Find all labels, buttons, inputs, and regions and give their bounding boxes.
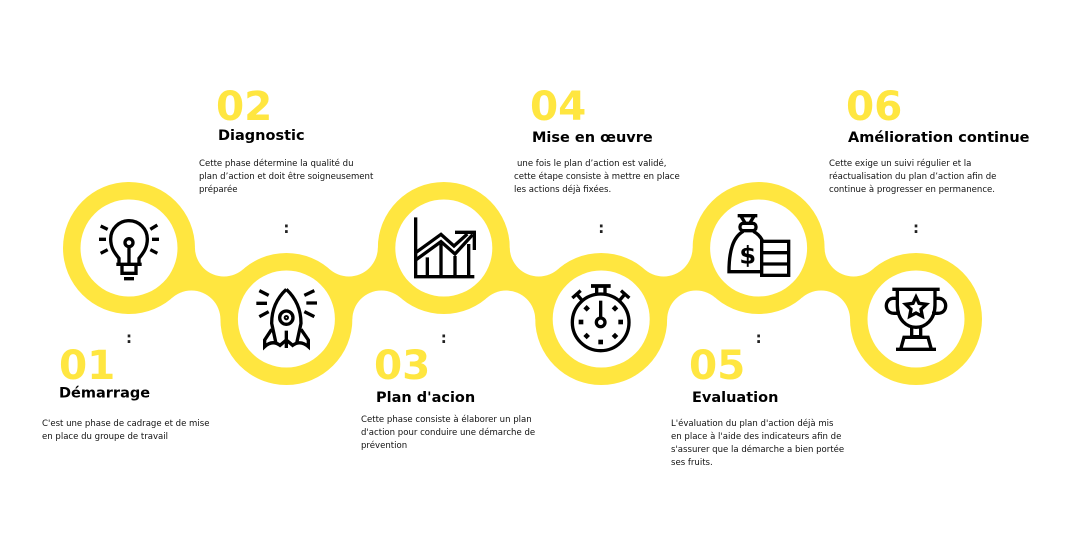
separator dots: : bbox=[126, 329, 132, 347]
step 06: continue à progresser en permanence. bbox=[829, 185, 995, 195]
step 03 bbox=[361, 341, 535, 451]
step 01: Démarrage bbox=[59, 386, 150, 402]
step 03: prévention bbox=[361, 440, 407, 451]
step 03: Cette phase consiste à élaborer un plan bbox=[361, 414, 532, 425]
icon: light bulb bbox=[99, 221, 159, 279]
step 06: 06 bbox=[846, 82, 902, 130]
step 02: préparée bbox=[199, 184, 238, 195]
step 03: Plan d'acion bbox=[376, 390, 475, 406]
step 05: ses fruits. bbox=[671, 458, 713, 468]
step 02: 02 bbox=[216, 82, 272, 130]
icon: growth chart bbox=[416, 217, 474, 277]
step 06: réactualisation du plan d’action afin de bbox=[829, 171, 996, 182]
icon: money bag and coins: $ bbox=[739, 242, 756, 270]
icon: trophy bbox=[886, 289, 946, 349]
step 05: L'évaluation du plan d'action déjà mis bbox=[671, 418, 834, 429]
separator dots: : bbox=[283, 219, 289, 237]
separator dots: : bbox=[441, 329, 447, 347]
icon: stopwatch bbox=[572, 286, 629, 351]
step 01: C'est une phase de cadrage et de mise bbox=[42, 419, 209, 429]
step 03: d'action pour conduire une démarche de bbox=[361, 427, 535, 438]
separator dots: : bbox=[598, 219, 604, 237]
step 02: plan d’action et doit être soigneusement bbox=[199, 171, 374, 182]
step 01: 01 bbox=[59, 341, 115, 389]
step 04: une fois le plan d’action est validé, bbox=[517, 158, 667, 169]
step 05: Evaluation bbox=[692, 390, 778, 406]
step 01: en place du groupe de travail bbox=[42, 432, 168, 442]
step 04: cette étape consiste à mettre en place bbox=[514, 171, 680, 182]
step 04: 04 bbox=[530, 82, 586, 130]
step 03: 03 bbox=[374, 341, 430, 389]
icon: money bag and coins bbox=[729, 216, 789, 275]
step 06 bbox=[829, 82, 1030, 195]
icon: rocket bbox=[256, 289, 317, 348]
step 05 bbox=[671, 341, 844, 468]
separator dots: : bbox=[913, 219, 919, 237]
step 02: Cette phase détermine la qualité du bbox=[199, 158, 354, 169]
step 05: s'assurer que la démarche a bien portée bbox=[671, 444, 844, 455]
step 06: Amélioration continue bbox=[848, 130, 1030, 146]
step 04: Mise en œuvre bbox=[532, 130, 653, 146]
separator dots bbox=[126, 219, 919, 347]
step 05: 05 bbox=[689, 341, 745, 389]
step 04 bbox=[514, 82, 680, 195]
step 06: Cette exige un suivi régulier et la bbox=[829, 158, 971, 169]
step 01 bbox=[42, 341, 209, 442]
winding yellow ribbon bbox=[63, 182, 982, 385]
step 02: Diagnostic bbox=[218, 128, 305, 144]
step 04: les actions déjà fixées. bbox=[514, 184, 611, 195]
step 02 bbox=[199, 82, 374, 195]
step 05: en place à l'aide des indicateurs afin de bbox=[671, 432, 841, 442]
separator dots: : bbox=[756, 329, 762, 347]
